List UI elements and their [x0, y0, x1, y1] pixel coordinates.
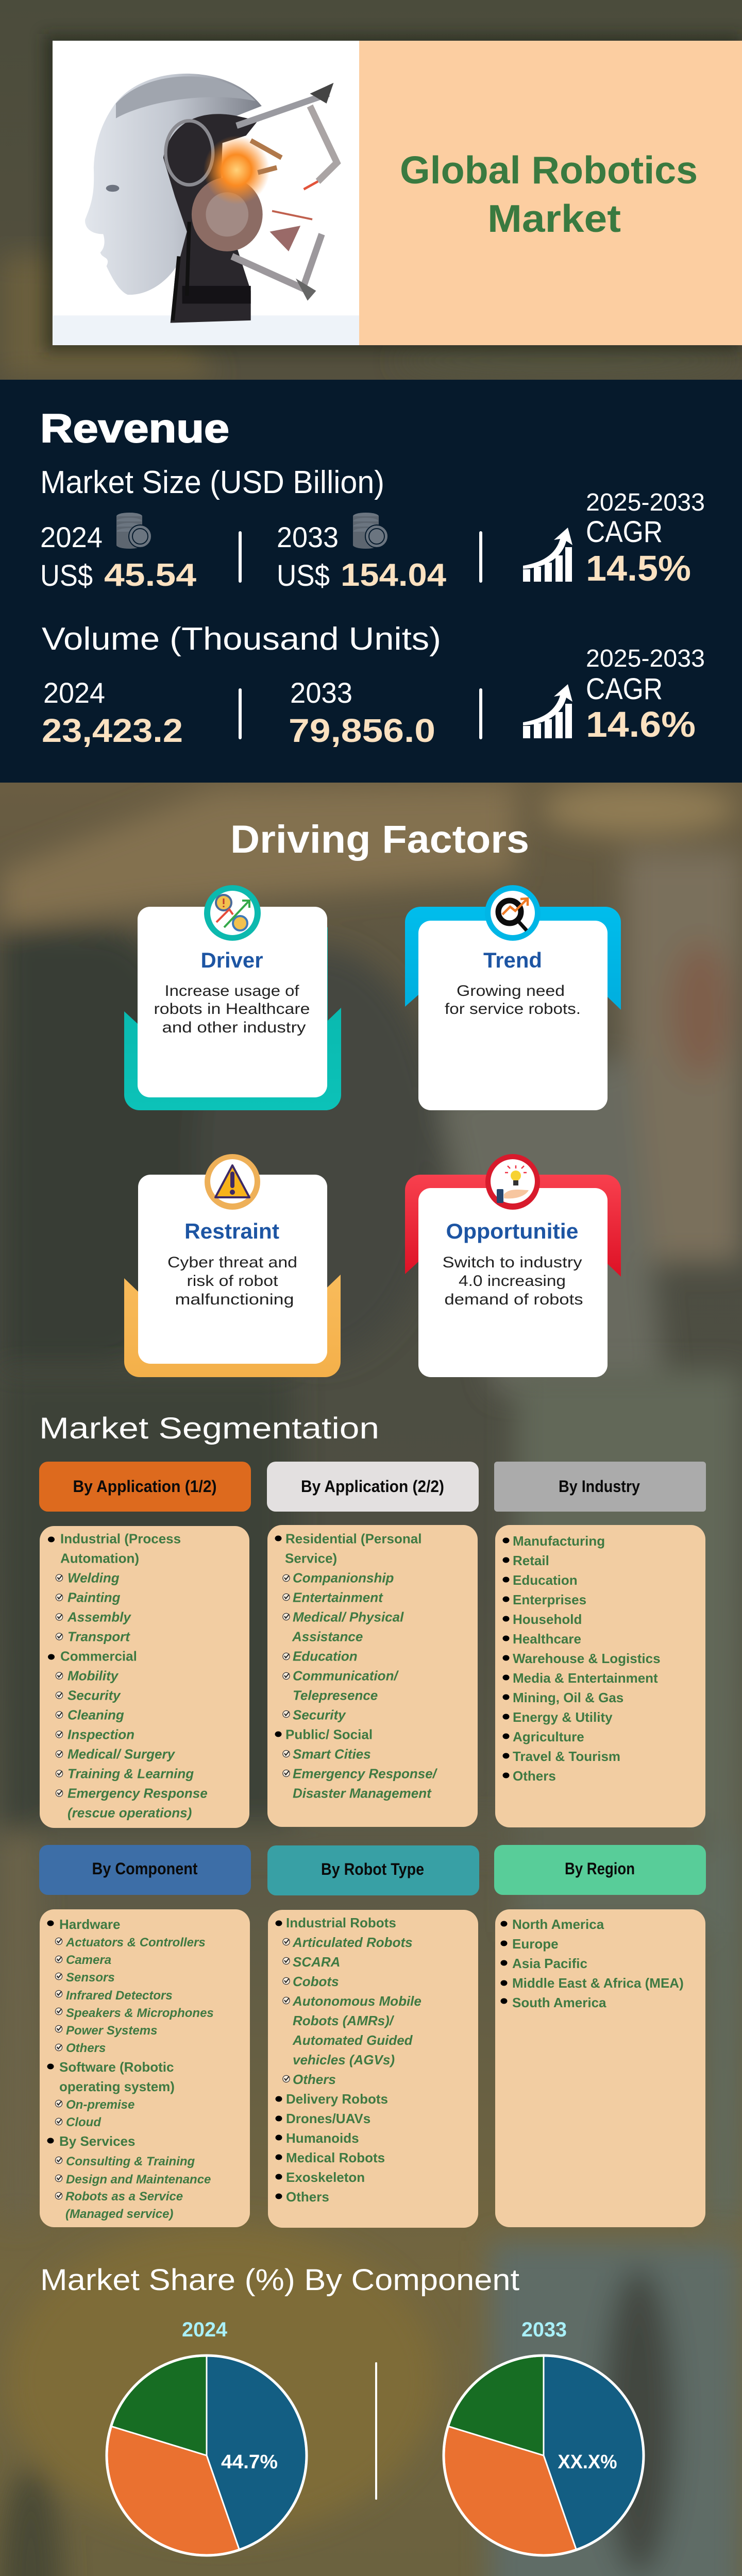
title: driver: Driver	[201, 948, 263, 972]
panel: component list: Software (Robotic	[59, 2059, 174, 2075]
market size 2024: 2024	[40, 521, 103, 553]
heading: market share by component: Market Share (%) By Component	[40, 2263, 519, 2297]
title: trend: Trend	[483, 948, 542, 972]
panel: revenue	[0, 380, 742, 783]
market size subheading: Market Size (USD Billion)	[40, 465, 384, 500]
volume CAGR: 14.6%	[586, 704, 696, 744]
panel: robot type list: Exoskeleton	[286, 2170, 365, 2185]
panel: industry list: Household	[513, 1612, 582, 1627]
text: opportunitie	[442, 1254, 583, 1308]
heading: revenue: Revenue	[40, 405, 229, 451]
panel: application list 2: Smart Cities	[293, 1747, 371, 1762]
panel: application list 2: Assistance	[292, 1629, 363, 1645]
panel: application list 1: Cleaning	[68, 1707, 124, 1723]
panel: application list 2: Medical/ Physical	[293, 1609, 404, 1625]
text: opportunitie: demand of robots	[444, 1291, 583, 1308]
panel: application list 1	[40, 1526, 249, 1828]
panel: robot type list: Autonomous Mobile	[292, 1993, 421, 2009]
panel: application list 1: (rescue operations)	[68, 1805, 192, 1821]
panel: robot type list: Industrial Robots	[286, 1915, 396, 1930]
panel: component list: Hardware	[59, 1917, 121, 1932]
volume 2024: 23,423.2	[42, 712, 183, 749]
panel: application list 1: Painting	[68, 1590, 121, 1605]
panel: application list 1: Commercial	[60, 1649, 137, 1664]
header: by region	[494, 1845, 706, 1895]
revenue CAGR: CAGR	[586, 515, 663, 549]
panel: application list 1: Assembly	[67, 1609, 131, 1625]
panel: industry list	[495, 1525, 705, 1827]
panel: application list 2: Telepresence	[293, 1688, 378, 1703]
title	[400, 148, 698, 240]
panel: component list: By Services	[59, 2133, 135, 2149]
text: opportunitie: 4.0 increasing	[459, 1273, 566, 1290]
panel: driver	[124, 885, 341, 1110]
year label 2024: 2024	[182, 2318, 228, 2341]
market size 2033: 154.04	[341, 557, 447, 593]
text: opportunitie: Switch to industry	[442, 1254, 582, 1271]
panel: industry list: Education	[513, 1572, 578, 1588]
header: by component	[39, 1845, 251, 1895]
panel: application list 1: Training & Learning	[68, 1766, 194, 1782]
icon: opportunitie	[485, 1154, 540, 1210]
panel: robot type list: Automated Guided	[292, 2032, 413, 2048]
header: by robot type	[267, 1845, 479, 1895]
text: driver	[154, 982, 310, 1036]
panel: robot type list: Cobots	[293, 1974, 339, 1989]
text: trend	[445, 982, 581, 1018]
panel: application list 2: Communication/	[293, 1668, 399, 1684]
icon: driver	[204, 885, 261, 941]
panel: robot type list: Others	[293, 2072, 336, 2087]
panel: robot type list: Robots (AMRs)/	[293, 2013, 395, 2028]
panel: industry list: Media & Entertainment	[513, 1670, 658, 1686]
market size 2024: 45.54	[104, 557, 197, 593]
volume 2024	[42, 676, 183, 749]
text: restraint: Cyber threat and	[167, 1254, 297, 1271]
panel: component list: Sensors	[66, 1971, 115, 1985]
panel: industry list: Mining, Oil & Gas	[513, 1690, 623, 1705]
panel: opportunitie	[405, 1154, 621, 1377]
panel: application list 1: Inspection	[68, 1727, 134, 1742]
header: by industry: By Industry	[559, 1477, 640, 1496]
panel: component list: Actuators & Controllers	[65, 1936, 206, 1950]
volume 2033	[289, 676, 435, 749]
panel: application list 2: Disaster Management	[293, 1786, 432, 1801]
market size 2024	[40, 513, 197, 593]
pie chart: component 2033: XX.X%	[558, 2451, 617, 2473]
panel: robot type list: Others	[286, 2189, 329, 2205]
title: Market	[487, 197, 621, 240]
panel: application list 2: Companionship	[293, 1570, 394, 1586]
panel: component list: Speakers & Microphones	[66, 2006, 214, 2020]
panel: industry list: Enterprises	[513, 1592, 586, 1607]
market size 2024: US$	[40, 559, 93, 592]
icon: growth arrow	[523, 528, 572, 582]
icon: growth arrow	[523, 684, 572, 738]
panel: region list: Middle East & Africa (MEA)	[512, 1975, 684, 1991]
panel: industry list: Warehouse & Logistics	[513, 1651, 661, 1666]
panel: application list 1: Medical/ Surgery	[68, 1747, 176, 1762]
panel: application list 1: Industrial (Process	[60, 1531, 181, 1547]
panel: application list 1: Welding	[68, 1570, 120, 1586]
panel: application list 2: Security	[293, 1707, 346, 1723]
panel: component list: Consulting & Training	[66, 2155, 195, 2168]
text: restraint: risk of robot	[187, 1273, 278, 1290]
text: restraint: malfunctioning	[175, 1291, 294, 1308]
panel: robot type list: Drones/UAVs	[286, 2111, 370, 2126]
panel: application list 2: Public/ Social	[285, 1727, 373, 1742]
panel: component list: Design and Maintenance	[66, 2173, 211, 2187]
panel: application list 1: Emergency Response	[68, 1786, 208, 1801]
panel: trend	[405, 885, 621, 1110]
text: driver: and other industry	[162, 1019, 306, 1036]
pie chart: component 2024: 44.7%	[221, 2451, 278, 2473]
volume CAGR	[586, 645, 705, 744]
panel: industry list: Healthcare	[513, 1631, 581, 1647]
panel: industry list: Others	[513, 1768, 556, 1784]
pie chart: component 2024	[107, 2355, 307, 2555]
panel: region list: Europe	[512, 1936, 559, 1952]
year label 2033: 2033	[521, 2318, 567, 2341]
panel: application list 1: Security	[68, 1688, 121, 1703]
panel: robot type list: Humanoids	[286, 2130, 359, 2146]
header: by application 2/2	[267, 1462, 479, 1512]
panel: component list: Cloud	[66, 2115, 102, 2129]
panel: restraint	[124, 1154, 341, 1377]
revenue CAGR	[586, 489, 705, 588]
panel: region list: South America	[512, 1995, 606, 2010]
panel: application list 1: Automation)	[60, 1551, 139, 1566]
panel: industry list: Travel & Tourism	[513, 1749, 620, 1764]
panel: component list: Infrared Detectors	[66, 1989, 173, 2003]
panel: application list 2: Emergency Response/	[293, 1766, 438, 1782]
volume 2024: 2024	[43, 676, 105, 709]
volume CAGR: CAGR	[586, 672, 663, 706]
panel: robot type list	[268, 1910, 478, 2228]
text: restraint	[167, 1254, 297, 1308]
heading: driving factors: Driving Factors	[230, 818, 529, 861]
header: by application 2/2: By Application (2/2)	[301, 1477, 444, 1496]
market size 2033: 2033	[277, 521, 339, 553]
panel: robot type list: vehicles (AGVs)	[293, 2052, 395, 2067]
header: by robot type: By Robot Type	[321, 1860, 424, 1878]
text: driver: robots in Healthcare	[154, 1001, 310, 1018]
panel: robot type list: Delivery Robots	[286, 2091, 388, 2107]
hero image: robot head	[53, 41, 359, 345]
title: Global Robotics	[400, 148, 698, 192]
panel: component list	[40, 1909, 250, 2227]
panel: component list: On-premise	[66, 2098, 134, 2112]
market size 2033: US$	[277, 559, 330, 592]
volume CAGR: 2025-2033	[586, 645, 705, 672]
pie chart: component 2033	[444, 2355, 644, 2555]
panel: region list	[495, 1909, 705, 2227]
panel: industry list: Agriculture	[513, 1729, 584, 1744]
panel: application list 2: Residential (Personal	[285, 1531, 421, 1547]
panel: industry list: Energy & Utility	[513, 1709, 613, 1725]
revenue CAGR: 14.5%	[586, 548, 691, 588]
market size 2033	[277, 513, 447, 593]
volume subheading: Volume (Thousand Units)	[42, 621, 441, 657]
panel: application list 2: Entertainment	[293, 1590, 383, 1605]
panel: application list 1: Mobility	[68, 1668, 119, 1684]
text: trend: for service robots.	[445, 1001, 581, 1018]
revenue CAGR: 2025-2033	[586, 489, 705, 516]
panel: component list: (Managed service)	[65, 2207, 173, 2221]
text: trend: Growing need	[457, 982, 565, 999]
hero: drop shadow	[44, 34, 742, 352]
panel: region list: North America	[512, 1917, 604, 1932]
panel: application list 2	[267, 1525, 478, 1827]
panel: industry list: Manufacturing	[513, 1533, 605, 1549]
volume 2033: 79,856.0	[289, 712, 435, 749]
volume 2033: 2033	[290, 676, 352, 709]
panel: robot type list: SCARA	[293, 1954, 340, 1970]
icon: restraint	[205, 1154, 260, 1210]
panel: component list: Robots as a Service	[65, 2190, 183, 2204]
title: opportunitie: Opportunitie	[446, 1219, 578, 1243]
hero title panel	[359, 41, 742, 345]
panel: region list: Asia Pacific	[512, 1956, 587, 1971]
header: by region: By Region	[565, 1859, 635, 1878]
panel: component list: Camera	[66, 1953, 111, 1967]
header: by application 1/2: By Application (1/2)	[73, 1477, 216, 1496]
panel: component list: operating system)	[59, 2079, 175, 2094]
panel: application list 1: Transport	[68, 1629, 130, 1645]
heading: market segmentation: Market Segmentation	[39, 1412, 379, 1445]
header: by application 1/2	[39, 1462, 251, 1512]
panel: robot type list: Articulated Robots	[292, 1935, 413, 1950]
panel: industry list: Retail	[513, 1553, 549, 1568]
panel: component list: Others	[66, 2041, 106, 2055]
panel: application list 2: Education	[293, 1649, 358, 1664]
header: by component: By Component	[92, 1859, 198, 1878]
text: driver: Increase usage of	[165, 982, 299, 999]
icon: trend	[485, 885, 541, 941]
title: restraint: Restraint	[184, 1219, 279, 1243]
panel: application list 2: Service)	[285, 1551, 337, 1566]
panel: component list: Power Systems	[66, 2024, 157, 2038]
header: by industry	[494, 1462, 706, 1512]
panel: robot type list: Medical Robots	[286, 2150, 385, 2165]
